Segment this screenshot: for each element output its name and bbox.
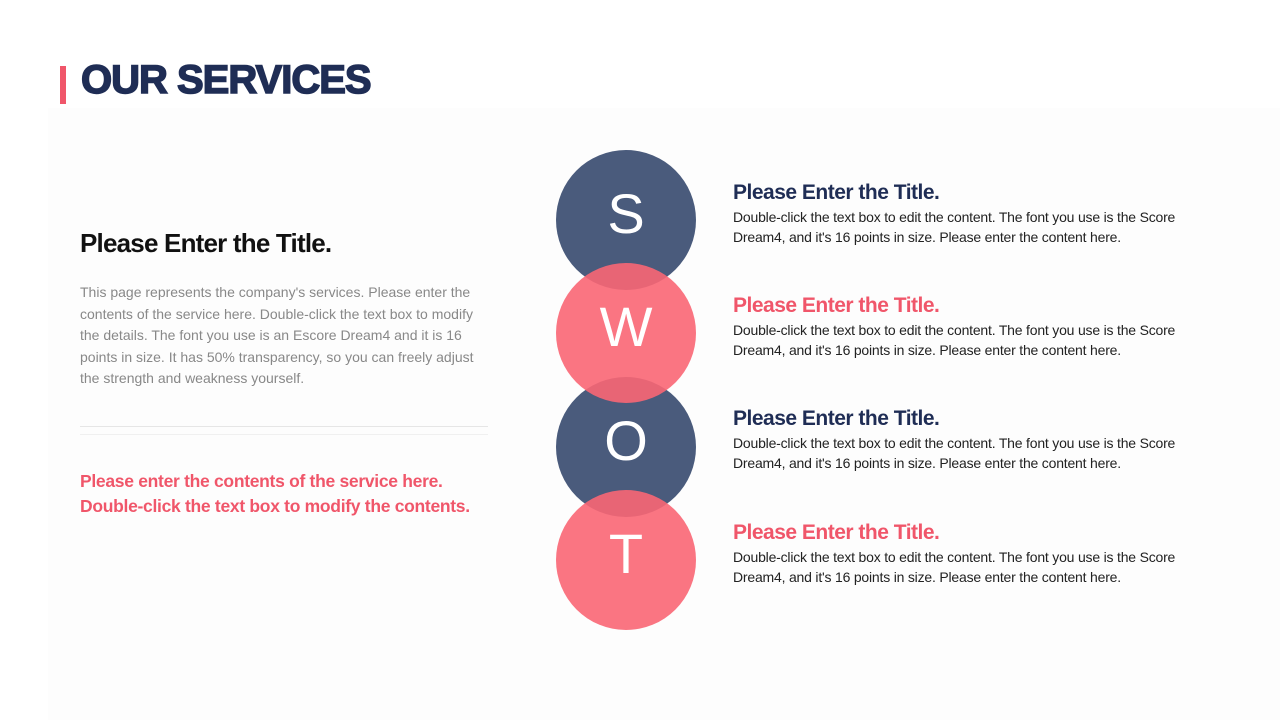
item T — [733, 521, 1175, 585]
left highlight text: Please enter the contents of the service here. — [80, 471, 443, 491]
SWOT circles: S — [607, 182, 645, 245]
item T: Double-click the text box to edit the content. The font you use is the Score Dream4, and it's 16 points in size. Please enter the content here. — [733, 549, 1175, 584]
item S: Double-click the text box to edit the content. The font you use is the Score Dream4, and it's 16 points in size. Please enter the content here. — [733, 209, 1175, 244]
SWOT circles: O — [604, 409, 648, 472]
circle S — [556, 150, 696, 290]
circle T — [556, 490, 696, 630]
left highlight text: Double-click the text box to modify the contents. — [80, 496, 470, 516]
circle W — [556, 263, 696, 403]
SWOT circles: W — [600, 295, 653, 358]
left highlight text — [80, 471, 470, 516]
item O — [733, 407, 1175, 471]
left heading: Please Enter the Title. — [80, 228, 331, 258]
item S: Please Enter the Title. — [733, 181, 939, 204]
item O: Double-click the text box to edit the content. The font you use is the Score Dream4, and it's 16 points in size. Please enter the content here. — [733, 435, 1175, 470]
item O: Please Enter the Title. — [733, 407, 939, 430]
item S — [733, 181, 1175, 245]
circle O — [556, 377, 696, 517]
title: OUR SERVICES — [81, 58, 371, 102]
item W — [733, 294, 1175, 358]
item T: Please Enter the Title. — [733, 521, 939, 544]
SWOT circles: T — [609, 522, 643, 585]
item W: Please Enter the Title. — [733, 294, 939, 317]
left body text: This page represents the company's services. Please enter the contents of the service here. Double-click the text box to modify the details. The font you use is an Escore Dream4 and it is 16 points in size. It has 50% transparency, so you can freely adjust the strength and weakness yourself. — [80, 284, 474, 386]
item W: Double-click the text box to edit the content. The font you use is the Score Dream4, and it's 16 points in size. Please enter the content here. — [733, 322, 1175, 358]
